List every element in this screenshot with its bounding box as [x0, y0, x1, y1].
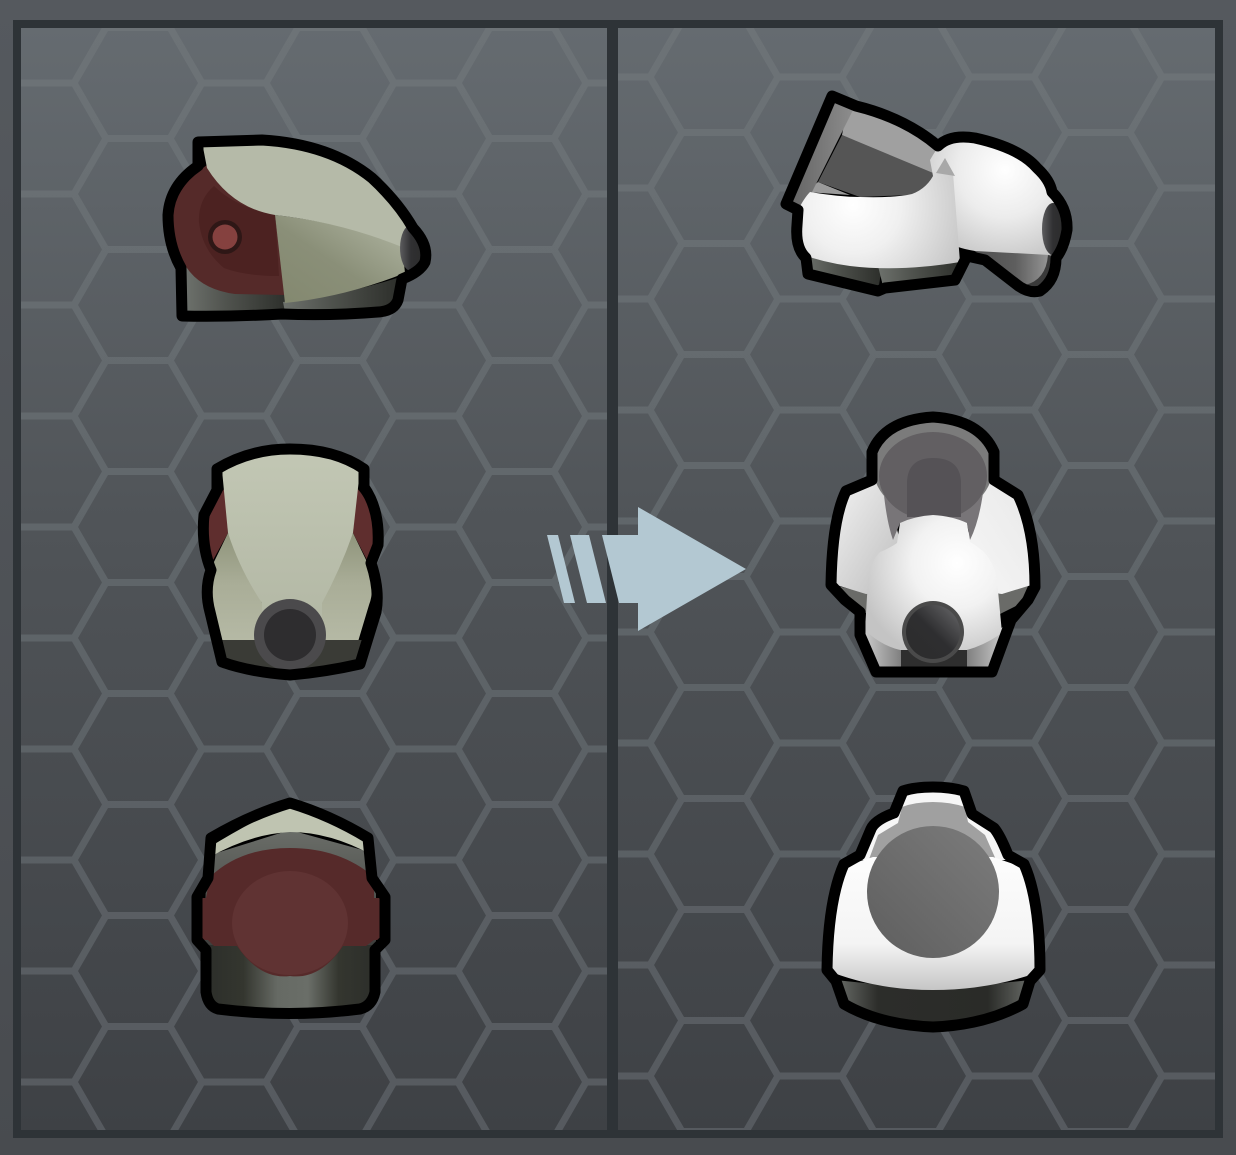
panel: after: [618, 28, 1215, 1130]
before turret: front view: [203, 449, 378, 676]
arrow: transformation direction: [547, 507, 746, 631]
after turret: front view: [830, 417, 1038, 676]
panel: before: [21, 28, 607, 1130]
after turret: rear view: [826, 785, 1042, 1028]
before turret: side view: [168, 140, 426, 316]
before turret: rear view: [196, 803, 386, 1014]
after turret: side view: [784, 92, 1067, 294]
